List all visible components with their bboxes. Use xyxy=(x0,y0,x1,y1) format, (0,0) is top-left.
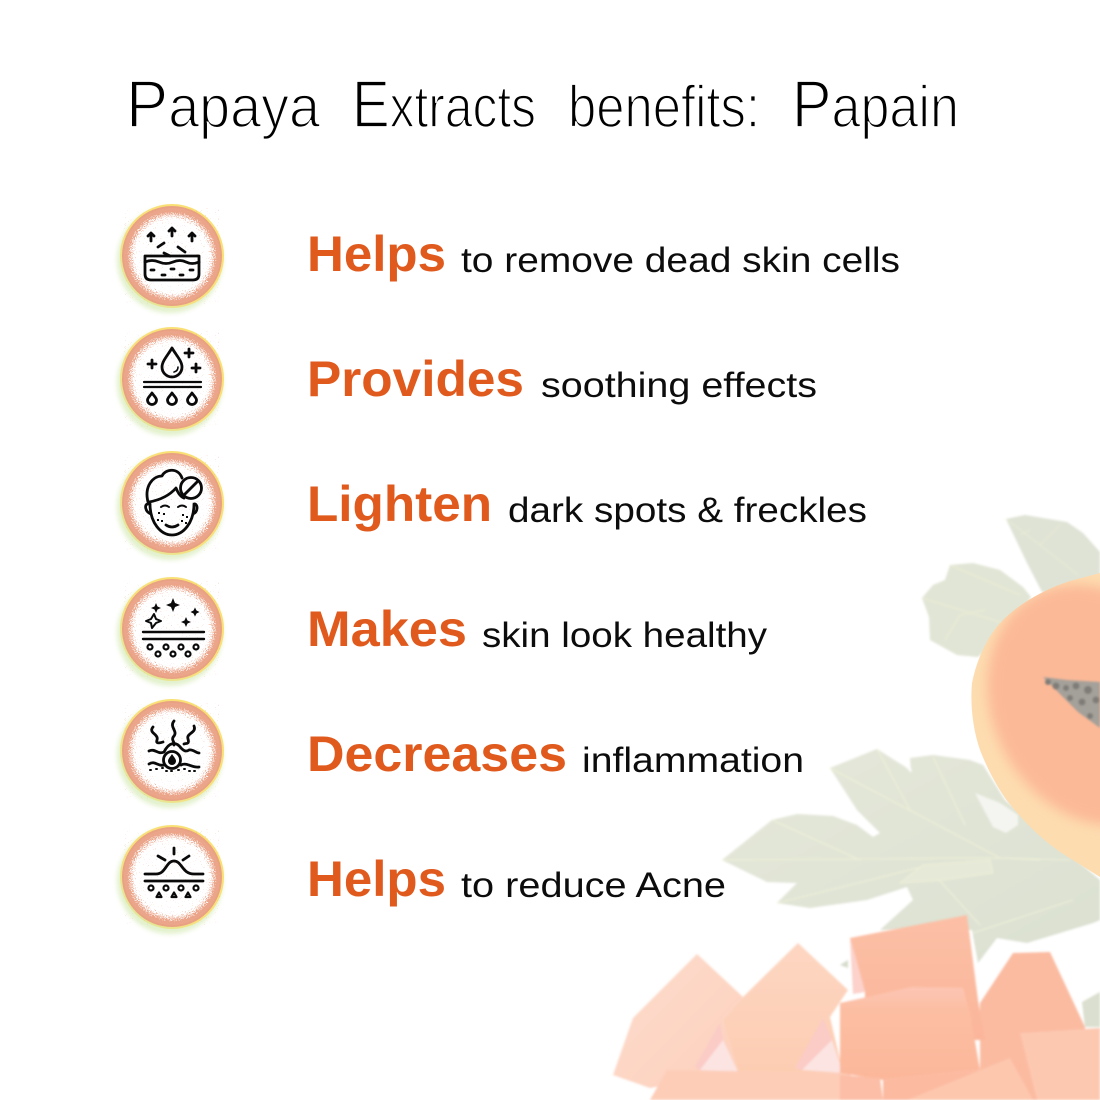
text: lighten dark spots and freckles: Lighten xyxy=(307,476,492,532)
left small leaf xyxy=(922,563,1031,657)
icon: soothing drop xyxy=(117,327,224,436)
papaya half xyxy=(971,573,1100,877)
papaya seeds xyxy=(1043,677,1100,728)
text: helps remove dead skin cells: Helps xyxy=(307,226,446,282)
text: makes skin look healthy xyxy=(307,601,768,657)
title: Extracts xyxy=(352,67,536,142)
text: provides soothing effects: soothing effects xyxy=(541,366,817,405)
title: Papain xyxy=(792,67,959,142)
title: Papaya xyxy=(126,67,320,142)
large papaya leaf xyxy=(722,749,1100,963)
text: helps remove dead skin cells: to remove dead skin cells xyxy=(461,241,900,280)
text: makes skin look healthy: Makes xyxy=(307,601,467,657)
background: papaya and leaves photo xyxy=(613,515,1100,1100)
leaf stem fold xyxy=(900,860,993,883)
text: provides soothing effects xyxy=(307,351,817,407)
icon: inflammation xyxy=(117,699,224,808)
text: helps reduce acne: Helps xyxy=(307,851,446,907)
text: decreases inflammation: inflammation xyxy=(582,741,804,780)
text: lighten dark spots and freckles xyxy=(307,476,867,532)
title xyxy=(126,67,959,142)
papaya cubes xyxy=(613,915,1100,1100)
top right leaf xyxy=(1006,515,1100,600)
text: makes skin look healthy: skin look healthy xyxy=(482,616,768,655)
text: provides soothing effects: Provides xyxy=(307,351,524,407)
icon: reduce acne xyxy=(117,825,224,934)
icon: healthy skin sparkles xyxy=(117,577,224,686)
text: decreases inflammation xyxy=(307,726,804,782)
text: helps reduce acne: to reduce Acne xyxy=(461,866,726,905)
text: helps reduce acne xyxy=(307,851,726,907)
title: benefits: xyxy=(568,74,760,140)
icon: remove dead skin cells xyxy=(117,204,224,313)
text: lighten dark spots and freckles: dark spots & freckles xyxy=(508,491,867,530)
icon: face with freckles xyxy=(117,451,224,560)
text: decreases inflammation: Decreases xyxy=(307,726,567,782)
leaf hole xyxy=(975,793,1018,833)
text: helps remove dead skin cells xyxy=(307,226,900,282)
